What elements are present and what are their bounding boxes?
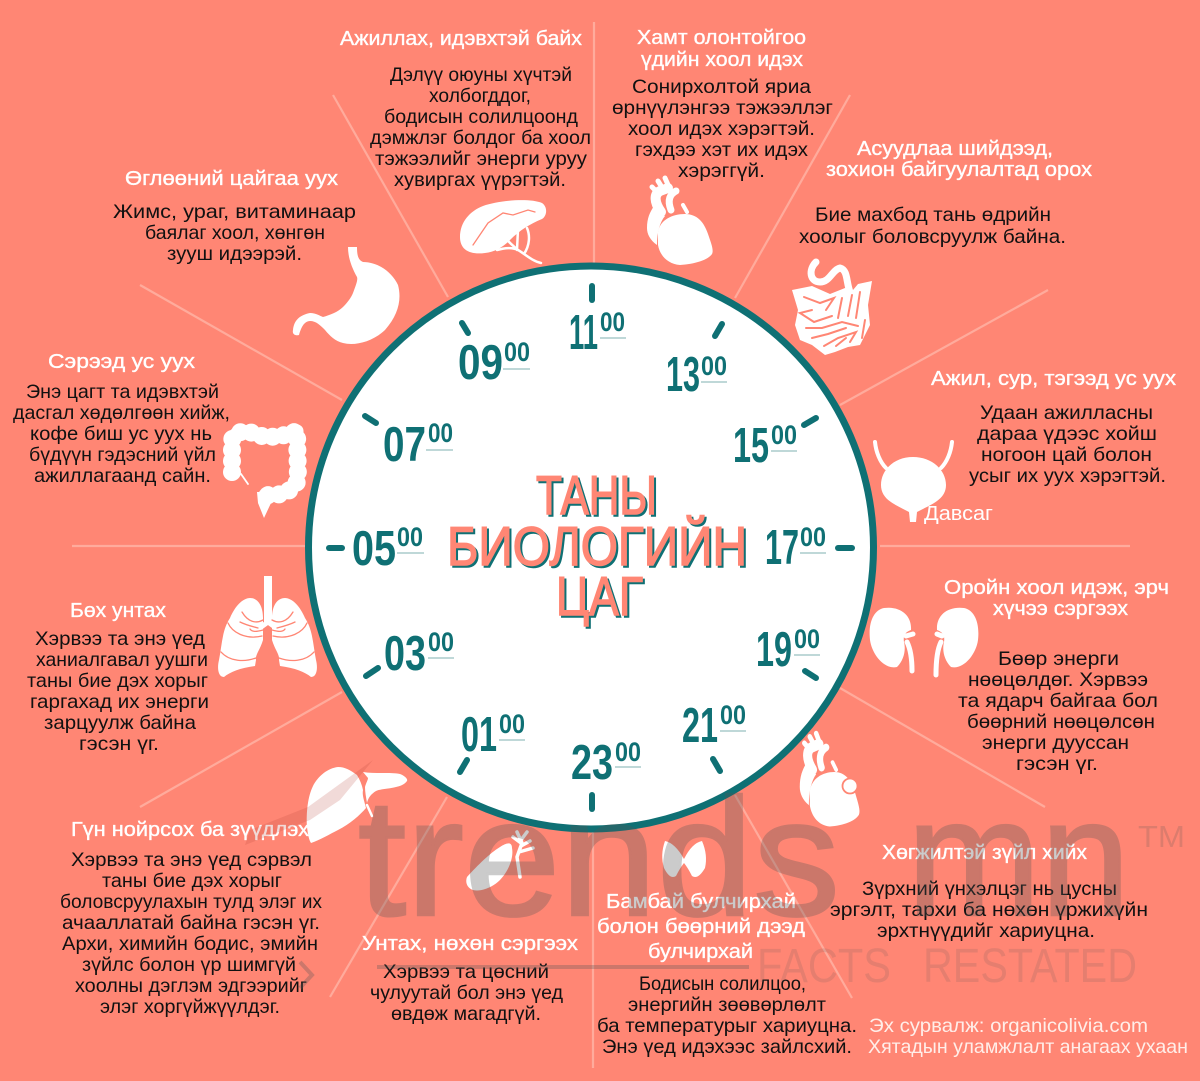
text block [597,973,857,1058]
text block: таны бие дэх хорыг [102,870,282,892]
text block: хэрэггүй. [678,160,765,182]
heading: Сэрээд ус уух [48,351,195,373]
hour 11:00: 11 [569,306,598,360]
heading: Хамт олонтойгоо [637,27,806,49]
icon: pancreas [460,200,546,263]
heading: булчирхай [648,941,753,963]
panel: 21:00 Хөгжилтэй зүйл хийх [800,733,1148,942]
text block: Жимс, ураг, витаминаар [113,201,356,223]
text block: Удаан ажилласны [980,402,1153,424]
icon: large intestine [232,431,298,518]
heading [597,891,805,963]
source note: Эх сурвалж: organicolivia.com [869,1015,1148,1037]
panel: 11:00 Ажиллах, идэвхтэй байх [340,28,591,263]
panel: 01:00 Унтах, нөхөн сэргээх [362,832,578,1025]
watermark: mn [907,765,1130,951]
text block: өвдөж магадгүй. [391,1003,541,1025]
text block [370,64,591,191]
text block: эргэлт, тархи ба нөхөн үржихүйн [830,899,1148,921]
text block: зарцуулж байна [44,712,196,734]
hour 11:00: 00 [600,307,625,337]
text block: нөөцөлдөг. Хэрвээ [968,669,1148,691]
source note: Хятадын уламжлалт анагаах ухаан [868,1036,1188,1058]
text block: Бие махбод тань өдрийн [815,204,1051,226]
title [447,464,747,627]
source note [868,1015,1188,1058]
heading [637,27,806,71]
hour 17:00: 17 [765,521,799,575]
hour 21:00: 00 [720,700,746,730]
text block: гэсэн үг. [1016,753,1098,775]
panel: 19:00 Оройн хоол идэж [870,577,1169,775]
text block: гаргахад их энерги [30,691,209,713]
text block: Хэрвээ та энэ үед сэрвэл [71,849,312,871]
hour 05:00: 00 [397,522,423,552]
watermark: FACTS [757,940,891,993]
text block: Бөөр энерги [998,648,1119,670]
heading: Хөгжилтэй зүйл хийх [882,842,1087,864]
title: БИОЛОГИЙН [447,514,747,577]
title: ЦАГ [556,565,643,627]
hour 13:00: 13 [666,348,700,402]
title: ТАНЫ [536,464,657,526]
panel: 03:00 Гүн нойрсох ба зүүдлэх [60,767,407,1018]
text block: та ядарч байгаа бол [958,690,1158,712]
heading: Асуудлаа шийдээд, [857,138,1053,160]
panel: 09:00 Өглөөний цайгаа уух [113,168,399,344]
watermark [245,760,1185,993]
text block [969,402,1166,487]
text block: боловсруулахын тулд элэг их [60,891,322,913]
hour 19:00: 19 [756,623,792,677]
hour 07:00: 00 [428,418,453,448]
text block: таны бие дэх хорыг [27,670,208,692]
icon: liver [307,767,407,843]
heading: үдийн хоол идэх [641,49,803,71]
hour 01:00: 01 [461,708,497,762]
watermark: TM [1138,819,1185,854]
text block: ба температурыг хариуцна. [597,1015,857,1037]
text block: гэсэн үг. [79,733,159,755]
text block [830,878,1148,942]
text block: баялаг хоол, хөнгөн [145,222,325,244]
text block [27,628,209,755]
text block: чулуутай бол энэ үед [370,982,564,1004]
text block: хувиргах үүрэгтэй. [394,169,566,191]
hour 07:00: 07 [383,418,426,472]
heading: Бөх унтах [70,600,166,622]
hour 15:00: 15 [733,419,769,473]
icon: small intestine [792,262,872,355]
hour ticks [329,286,852,809]
text block: Бодисын солилцоо, [639,973,806,995]
heading: Унтах, нөхөн сэргээх [362,933,578,955]
hour 09:00: 00 [504,337,530,367]
text block: бодисын солилцоонд [384,106,579,128]
icon: thyroid [662,841,706,877]
text block: Дэлүү оюуны хүчтэй [390,64,572,86]
icon: heart [647,178,713,265]
text block: дараа үдээс хойш [977,423,1157,445]
heading: зохион байгуулалтад орох [826,159,1092,181]
text block: кофе биш ус уух нь [30,423,212,445]
panel: 23:00 Бамбай булчирхай [597,841,857,1058]
heading: болон бөөрний дээд [597,916,805,938]
text block [60,849,322,1018]
hour 19:00: 00 [794,624,820,654]
icon: kidneys [870,608,978,675]
text block: Хэрвээ та энэ үед [35,628,206,650]
hour 21:00: 21 [682,699,718,753]
text block: гэхдээ хэт их идэх [635,139,808,161]
text block: Энэ цагт та идэвхтэй [26,381,219,403]
text block [799,204,1066,248]
icon: heart with pericardium [800,733,860,827]
heading: Өглөөний цайгаа уух [125,168,338,190]
text block: энерги дууссан [982,732,1129,754]
text block: эрхтнүүдийг хариуцна. [877,920,1095,942]
panel: 17:00 Ажил, сур, тэгээд ус уух [875,368,1176,525]
hour 13:00: 00 [701,351,727,381]
text block: хоолыг боловсруулж байна. [799,226,1066,248]
text block: хоолны дэглэм эдгээрийг [75,975,307,997]
text block: өрнүүлэнгээ тэжээллэг [612,97,833,119]
icon: gallbladder [466,832,533,891]
text block: зүйлс болон үр шимгүй [82,954,296,976]
text block [612,76,833,182]
text block: ачааллатай байна гэсэн үг. [62,912,320,934]
organ label: Давсаг [924,503,993,525]
text block: Энэ үед идэхээс зайлсхий. [602,1036,852,1058]
text block: дэмжлэг болдог ба хоол [370,127,591,149]
text block: энергийн зөөвөрлөлт [628,994,826,1016]
text block [13,381,230,487]
text block [370,961,564,1025]
icon: lungs [218,576,317,677]
clock face [308,266,874,829]
icon: stomach [293,247,399,344]
panel: 13:00 Хамт олонтойгоо [612,27,833,265]
icon: bladder [875,442,993,525]
watermark: RESTATED [923,940,1137,993]
hour 15:00: 00 [771,420,797,450]
text block: ногоон цай болон [981,444,1152,466]
text block: бүдүүн гэдэсний үйл [29,444,216,466]
text block: Хэрвээ та цөсний [383,961,549,983]
heading [826,138,1092,181]
heading [944,577,1169,620]
text block [958,648,1158,775]
text block: бөөрний нөөцөлсөн [967,711,1155,733]
heading: Ажил, сур, тэгээд ус уух [931,368,1176,390]
hour 03:00: 03 [384,627,426,681]
hour 23:00: 00 [615,737,641,767]
hour 05:00: 05 [352,522,396,576]
panel: 05:00 Бөх унтах [27,576,317,755]
hour 17:00: 00 [800,522,826,552]
heading: Ажиллах, идэвхтэй байх [340,28,582,50]
text block [113,201,356,265]
text block: холбогддог, [429,85,531,107]
heading: хүчээ сэргээх [993,598,1128,620]
hour 03:00: 00 [428,627,454,657]
hour 23:00: 23 [571,736,613,790]
hour 01:00: 00 [499,709,525,739]
text block: зууш идээрэй. [167,243,302,265]
watermark: trends [358,765,840,951]
text block: ажиллагаанд сайн. [34,465,211,487]
text block: дасгал хөдөлгөөн хийж, [13,402,230,424]
hour 09:00: 09 [458,336,503,390]
heading: Оройн хоол идэж, эрч [944,577,1169,599]
text block: Сонирхолтой яриа [632,76,811,98]
text block: тэжээлийг энерги уруу [375,148,587,170]
heading: Бамбай булчирхай [606,891,796,913]
panel: 07:00 Сэрээд ус уух [13,351,298,518]
text block: Зүрхний үнхэлцэг нь цусны [862,878,1117,900]
text block: элэг хоргүйжүүлдэг. [100,996,280,1018]
text block: ханиалгавал уушги [36,649,208,671]
panel: 15:00 Асуудлаа шийдээд [792,138,1092,355]
text block: хоол идэх хэрэгтэй. [628,118,815,140]
text block: усыг их уух хэрэгтэй. [969,465,1166,487]
text block: Архи, химийн бодис, эмийн [62,933,318,955]
heading: Гүн нойрсох ба зүүдлэх [71,819,309,841]
